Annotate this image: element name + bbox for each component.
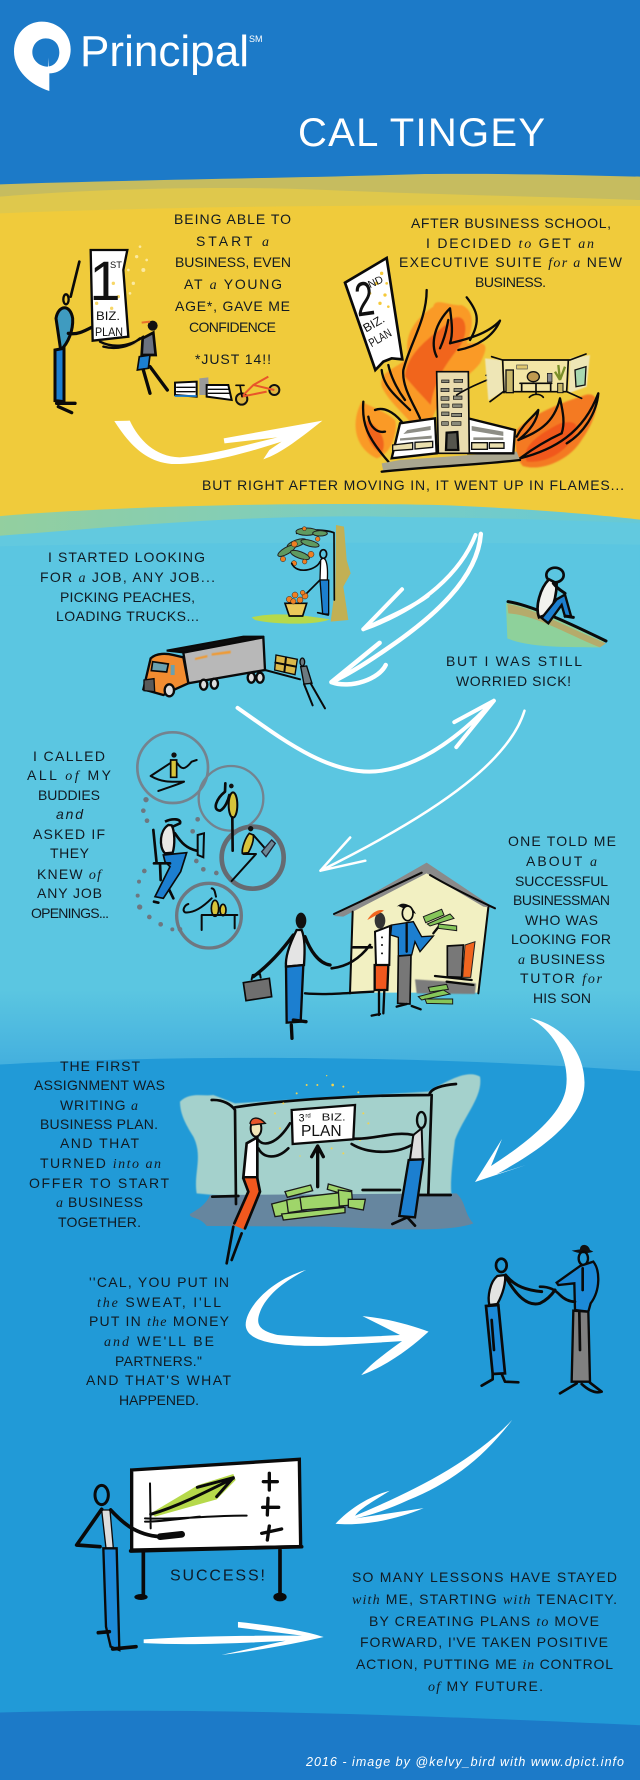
text block: called my buddies: BUDDIES (38, 787, 100, 803)
text block: partners quote (86, 1274, 231, 1408)
text block: worried sick: BUT I WAS STILL (446, 653, 582, 669)
text block: partners quote: and WE'LL BE (104, 1333, 214, 1350)
friend in hammock (151, 752, 197, 791)
text block: lessons: ACTION, PUTTING ME in CONTROL (356, 1656, 613, 1673)
cash (418, 909, 457, 1004)
text block: after business school: EXECUTIVE SUITE for a NEW (399, 254, 623, 271)
text block: called my buddies: and (56, 806, 84, 822)
loading worker (265, 655, 325, 708)
text block: started looking for a job: FOR a JOB, ANY JOB... (40, 569, 215, 586)
text block: partners quote: ''CAL, YOU PUT IN (89, 1274, 229, 1290)
text block: first assignment: TOGETHER. (58, 1214, 141, 1230)
illustration: first business plan (55, 245, 279, 413)
illustration: handshake partners (482, 1245, 602, 1393)
text block: partners quote: PUT IN the MONEY (89, 1313, 230, 1330)
text block: called my buddies: I CALLED (33, 748, 105, 764)
text block: called my buddies: KNEW of (37, 866, 103, 883)
illustration: building on fire (345, 258, 598, 472)
text block: first assignment: ASSIGNMENT WAS (34, 1077, 165, 1093)
second plan sign: BIZ. (360, 312, 387, 335)
sign: BIZ. (96, 309, 120, 323)
peach basket (285, 590, 308, 616)
illustration: house meeting (243, 863, 495, 1038)
text block: worried sick: WORRIED SICK! (456, 673, 571, 689)
logo: Principal (14, 22, 262, 91)
plan sign: BIZ. (322, 1113, 346, 1124)
text block: called my buddies: ALL of MY (27, 767, 112, 784)
belongings: newspapers and bike (175, 377, 279, 405)
text block: being able to start: CONFIDENCE (189, 319, 276, 335)
text block: one told me: TUTOR for (520, 970, 603, 987)
second plan sign: 2 (351, 270, 377, 327)
friend on couch (232, 826, 275, 881)
text block: first assignment: BUSINESS PLAN. (40, 1116, 158, 1132)
second plan sign: PLAN (366, 326, 394, 350)
text block: one told me: a BUSINESS (518, 951, 605, 968)
text block: called my buddies (27, 748, 112, 921)
friend at desk (184, 888, 237, 930)
son with cap (332, 910, 390, 1016)
icon: Principal P mark (14, 22, 71, 91)
arrows: up to worried, down to house (238, 701, 524, 871)
illustration: success chart (77, 1459, 302, 1650)
text block: started looking for a job (40, 549, 215, 624)
second plan sign (345, 258, 402, 370)
partner standing (352, 1112, 426, 1226)
text block: partners quote: AND THAT'S WHAT (86, 1372, 231, 1388)
presentation board (131, 1459, 302, 1601)
text block: started looking for a job: LOADING TRUCKS... (56, 608, 199, 624)
burning building (382, 372, 520, 472)
plan sign: rd (305, 1113, 311, 1119)
house (305, 863, 495, 994)
title: CAL TINGEY (298, 111, 545, 155)
tall figure (55, 262, 92, 413)
text block: lessons (352, 1569, 617, 1695)
flames (356, 302, 597, 468)
caption: went up in flames: BUT RIGHT AFTER MOVING IN, IT WENT UP IN FLAMES... (202, 477, 624, 493)
text block: one told me: BUSINESSMAN (513, 892, 610, 908)
partner left (482, 1259, 555, 1386)
partner right with hat (540, 1245, 602, 1393)
plan sign: 3 (299, 1113, 305, 1125)
office callout (485, 354, 590, 402)
text block: called my buddies: OPENINGS... (31, 905, 109, 921)
text block: first assignment (29, 1058, 169, 1230)
illustration: third business plan (180, 1074, 480, 1263)
text block: first assignment: TURNED into an (40, 1155, 161, 1172)
sparkle (127, 245, 148, 295)
flame outlines (363, 290, 598, 462)
illustration: worried figure on hill (506, 568, 606, 647)
friend standing (216, 783, 237, 851)
text block: being able to start: START a (196, 233, 269, 250)
text block: first assignment: WRITING a (60, 1097, 138, 1114)
footer credit: 2016 - image by @kelvy_bird with www.dpict.info (305, 1755, 624, 1769)
arrow: big white sweep to plan (475, 1018, 585, 1182)
text block: one told me: SUCCESSFUL (515, 873, 608, 889)
text block: being able to start: BUSINESS, EVEN (175, 254, 291, 270)
arrows: to partners, to success, forward (144, 1270, 512, 1655)
text block: started looking for a job: PICKING PEACHES, (60, 589, 195, 605)
text block: being able to start: *JUST 14!! (195, 351, 271, 367)
partner with cap (227, 1118, 290, 1263)
room backdrop (180, 1074, 480, 1229)
plan sign: PLAN (301, 1123, 342, 1140)
text block: worried sick (446, 653, 582, 689)
sign: ST (110, 260, 122, 270)
money pile (272, 1184, 365, 1220)
money arrow (312, 1146, 323, 1187)
text block: after business school: AFTER BUSINESS SCHOOL, (411, 215, 611, 231)
sign: 1 (89, 249, 121, 312)
text block: being able to start (174, 211, 291, 367)
caller at chair (153, 819, 204, 903)
phone circles (137, 732, 284, 948)
sign: PLAN (95, 325, 123, 339)
sparkle around plan (274, 1075, 369, 1157)
text block: being able to start: BEING ABLE TO (174, 211, 291, 227)
text block: one told me: WHO WAS (525, 912, 598, 928)
peach tree (252, 525, 351, 624)
businessman with money (391, 904, 440, 1009)
text block: called my buddies: ANY JOB (37, 885, 102, 901)
text block: being able to start: AGE*, GAVE ME (175, 298, 290, 314)
service mark: SM (249, 34, 262, 44)
sign (89, 249, 128, 341)
text block: lessons: of MY FUTURE. (428, 1678, 543, 1695)
text block: partners quote: the SWEAT, I'LL (97, 1294, 221, 1311)
text block: one told me: ABOUT a (526, 853, 597, 870)
text block: lessons: FORWARD, I'VE TAKEN POSITIVE (360, 1634, 608, 1650)
text block: lessons: BY CREATING PLANS to MOVE (369, 1613, 599, 1630)
text block: first assignment: a BUSINESS (56, 1194, 143, 1211)
presenter (77, 1485, 182, 1650)
picker (292, 550, 329, 615)
text block: being able to start: AT a YOUNG (184, 276, 282, 293)
short figure (100, 321, 167, 393)
arrow: first plan to second plan (114, 421, 322, 464)
caption: success: SUCCESS! (170, 1567, 265, 1584)
text block: partners quote: PARTNERS." (115, 1353, 202, 1369)
text block: partners quote: HAPPENED. (119, 1392, 199, 1408)
text block: after business school: I DECIDED to GET an (426, 235, 594, 252)
illustration: phone call network (136, 732, 284, 948)
text block: called my buddies: ASKED IF (33, 826, 105, 842)
text block: first assignment: THE FIRST (60, 1058, 140, 1074)
connecting dots (136, 797, 219, 932)
illustration: peach picking and truck (143, 525, 351, 708)
visitor with briefcase (243, 913, 330, 1038)
second plan sign: ND (366, 274, 385, 291)
text block: started looking for a job: I STARTED LOOKING (48, 549, 205, 565)
text block: lessons: with ME, STARTING with TENACITY. (352, 1591, 617, 1608)
text block: first assignment: AND THAT (60, 1135, 139, 1151)
text block: one told me (508, 833, 616, 1006)
text block: first assignment: OFFER TO START (29, 1175, 169, 1191)
wordmark: Principal (80, 27, 249, 76)
arrows: toward truck (331, 534, 481, 684)
text block: after business school: BUSINESS. (475, 274, 546, 290)
text block: one told me: LOOKING FOR (511, 931, 611, 947)
plan sign (292, 1105, 355, 1144)
text block: one told me: HIS SON (533, 990, 591, 1006)
text block: one told me: ONE TOLD ME (508, 833, 616, 849)
truck (143, 637, 265, 696)
text block: after business school (399, 215, 623, 290)
text block: called my buddies: THEY (50, 845, 90, 861)
text block: lessons: SO MANY LESSONS HAVE STAYED (352, 1569, 617, 1585)
